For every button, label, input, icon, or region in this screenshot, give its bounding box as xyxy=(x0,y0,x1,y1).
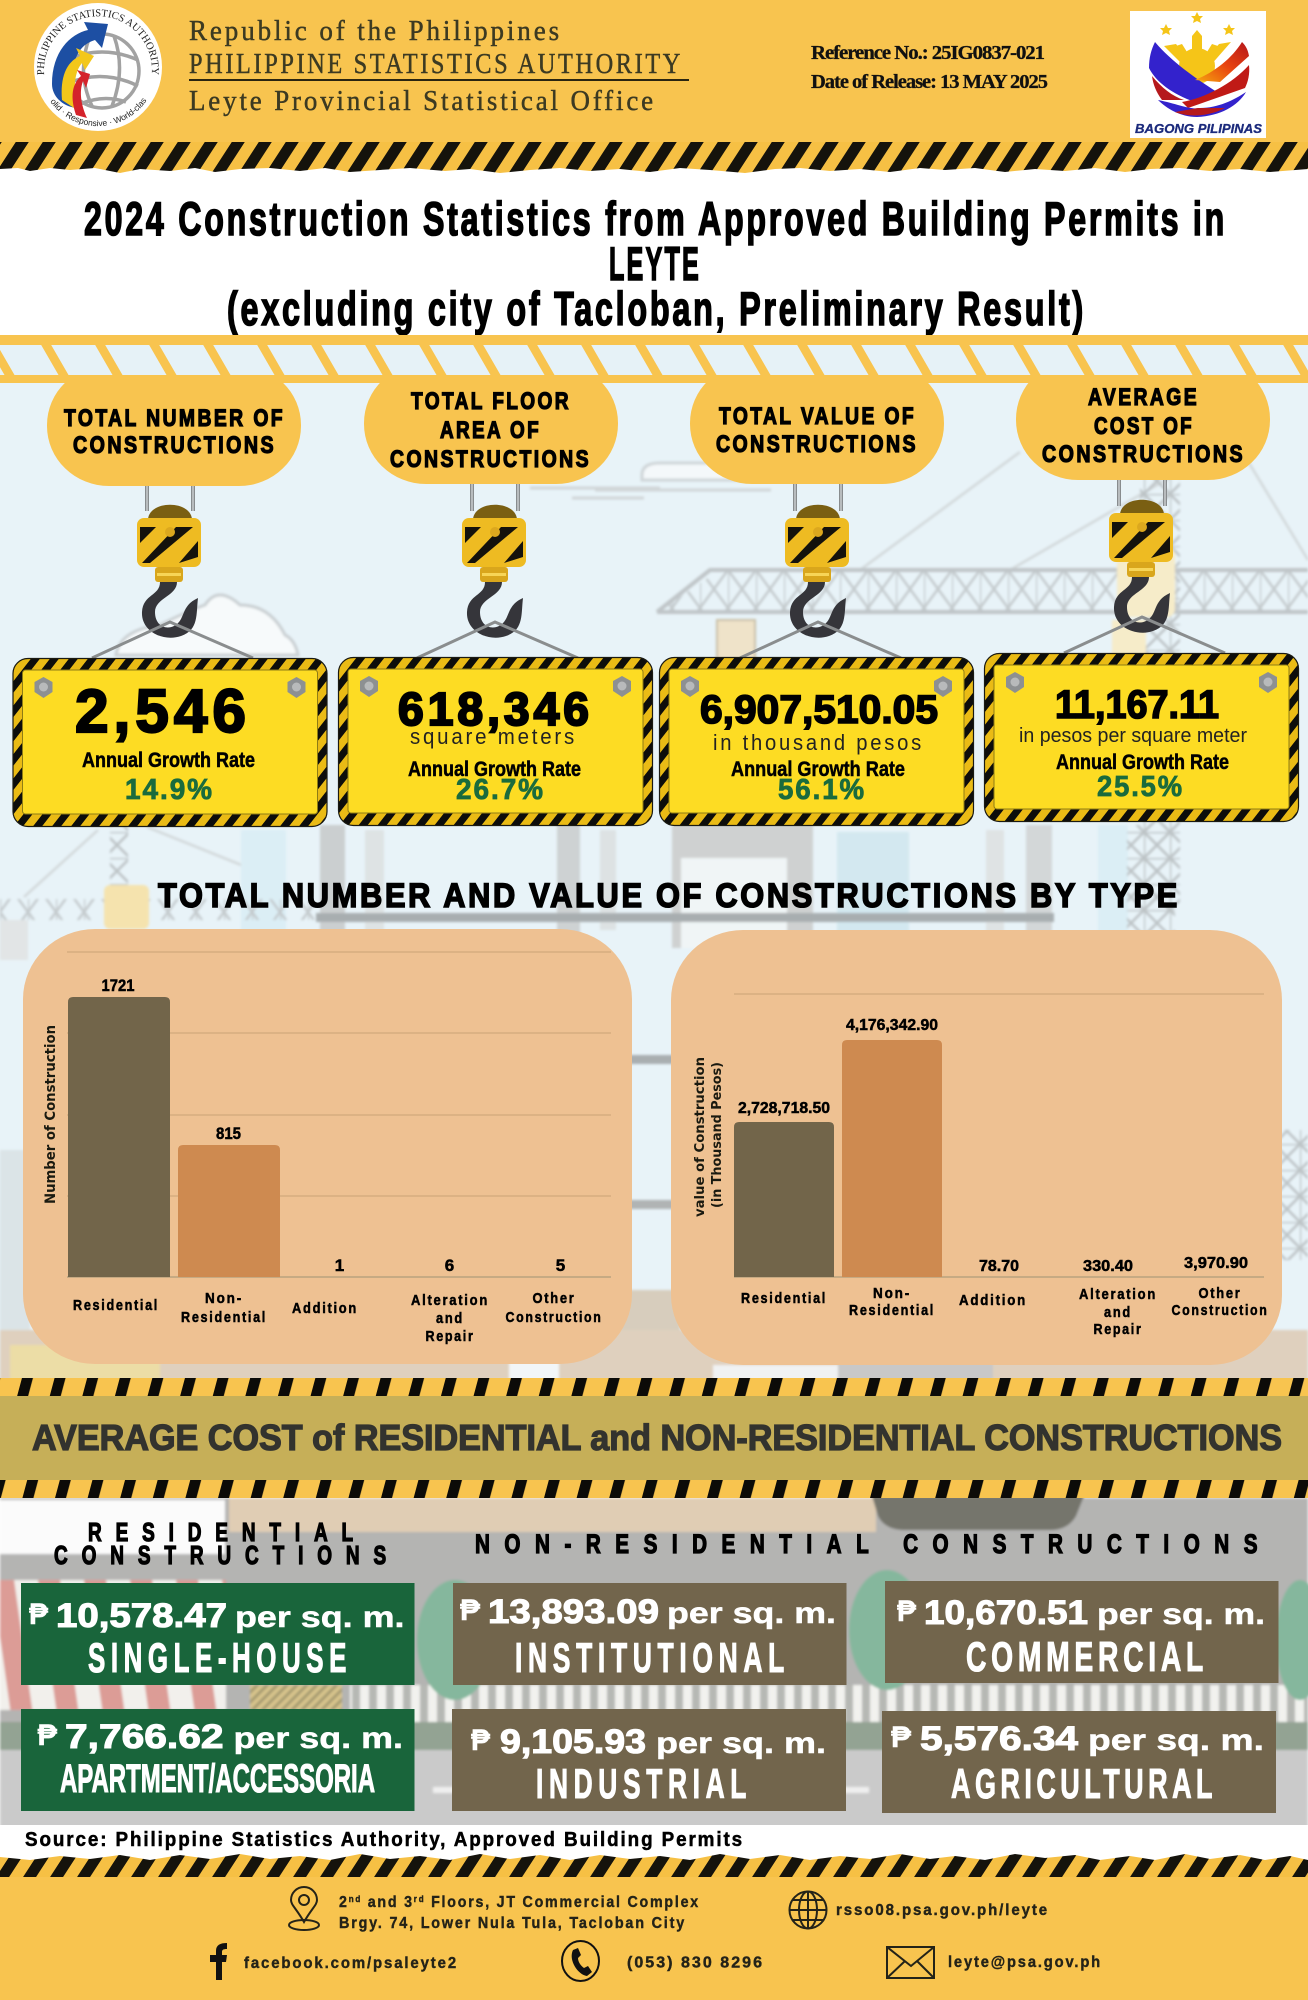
chart panel: value of constructions by type: 78.70 xyxy=(979,1258,1019,1275)
header band xyxy=(0,0,1308,145)
chart panel: number of constructions by type: Repair xyxy=(426,1328,474,1345)
hazard strip above footer xyxy=(0,1852,1308,1877)
title backdrop with torn paper edge xyxy=(0,168,1308,336)
chart panel: value of constructions by type: 4,176,342.90 xyxy=(846,1017,938,1034)
footer address: Brgy. 74, Lower Nula Tula, Tacloban City xyxy=(339,1915,686,1932)
bar: non-residential count xyxy=(178,1145,280,1277)
logo: Philippine Statistics Authority seal: PHILIPPINE STATISTICS AUTHORITY xyxy=(37,9,159,75)
footer facebook: facebook.com/psaleyte2 xyxy=(244,1955,458,1972)
chart panel: number of constructions by type: Other xyxy=(532,1290,576,1307)
logo: Bagong Pilipinas xyxy=(1130,11,1266,138)
footer email: leyte@psa.gov.ph xyxy=(948,1954,1102,1971)
cost card: institutional: 13,893.09 xyxy=(488,1593,659,1631)
label pill: floor area xyxy=(364,363,618,484)
chart panel: value of constructions by type: and xyxy=(1104,1304,1132,1321)
cost card: apartment/accessoria: APARTMENT/ACCESSORIA xyxy=(60,1757,375,1801)
footer address: 2 xyxy=(339,1894,350,1911)
label pill: total value: TOTAL VALUE OF xyxy=(719,403,916,430)
heading: residential constructions: RESIDENTIAL xyxy=(88,1517,367,1547)
sign: floor area: 618,346 xyxy=(398,683,593,735)
chart panel: number of constructions by type xyxy=(23,929,632,1364)
reference number and release date xyxy=(811,42,1048,93)
chart panel: value of constructions by type: (in Thousand Pesos) xyxy=(709,1062,725,1208)
label pill: total number: CONSTRUCTIONS xyxy=(73,432,276,459)
cost card: commercial: ₱ xyxy=(897,1595,917,1628)
sign: average cost xyxy=(984,654,1298,822)
sign: average cost: 11,167.11 xyxy=(1055,683,1219,727)
average cost band xyxy=(0,1396,1308,1480)
chart panel: value of constructions by type: Non- xyxy=(873,1285,911,1302)
chart panel: value of constructions by type: Residential xyxy=(741,1290,827,1307)
label pill: floor area: CONSTRUCTIONS xyxy=(390,446,591,473)
footer address: and 3 xyxy=(362,1894,414,1911)
logo: Bagong Pilipinas: BAGONG PILIPINAS xyxy=(1135,121,1262,136)
cost card: agricultural: ₱ xyxy=(891,1721,912,1754)
sign: total value: 56.1% xyxy=(778,774,866,806)
sign: average cost: 25.5% xyxy=(1097,771,1184,803)
cost card: apartment/accessoria: ₱ xyxy=(38,1719,58,1752)
icon: location pin xyxy=(289,1887,319,1930)
crane hook 1 xyxy=(92,470,253,658)
sign: total value: Annual Growth Rate xyxy=(731,758,905,781)
cost card: agricultural: per sq. m. xyxy=(1088,1724,1264,1757)
icon: phone xyxy=(562,1941,599,1981)
footer phone number: (053) 830 8296 xyxy=(627,1954,764,1972)
cost card: agricultural xyxy=(882,1711,1276,1813)
cost card: single-house: per sq. m. xyxy=(235,1601,404,1634)
label pill: total number: TOTAL NUMBER OF xyxy=(64,405,285,432)
chart panel: number of constructions by type: Number of Construction xyxy=(43,1025,59,1204)
cost card: institutional: ₱ xyxy=(460,1594,481,1627)
footer band xyxy=(0,1877,1308,2000)
reference number and release date: Date of Release: 13 MAY 2025 xyxy=(811,71,1048,93)
sign: total number: 14.9% xyxy=(125,774,214,806)
cost card: industrial: ₱ xyxy=(471,1724,491,1757)
crane hook 4 xyxy=(1064,465,1225,653)
cost card: industrial: per sq. m. xyxy=(656,1727,826,1760)
sign: total number xyxy=(13,658,327,826)
chart panel: number of constructions by type: 815 xyxy=(216,1124,241,1143)
title xyxy=(84,192,1227,335)
chart panel: value of constructions by type: Alteration xyxy=(1079,1286,1157,1303)
cost card: institutional: INSTITUTIONAL xyxy=(515,1634,790,1681)
chart panel: value of constructions by type: Residential xyxy=(849,1302,935,1319)
sign: total number: Annual Growth Rate xyxy=(82,749,255,772)
footer website: rsso08.psa.gov.ph/leyte xyxy=(836,1902,1049,1919)
cost card: apartment/accessoria: per sq. m. xyxy=(234,1722,403,1755)
chart panel: value of constructions by type: 2,728,718.50 xyxy=(738,1100,830,1117)
reference number and release date: Reference No.: 25IG0837-021 xyxy=(811,42,1044,64)
page background: construction site illustration xyxy=(0,345,1308,1828)
source band with torn edge xyxy=(0,1825,1308,1860)
heading: residential constructions: CONSTRUCTIONS xyxy=(54,1540,400,1570)
footer address: rd xyxy=(414,1894,425,1904)
hazard strip below average cost band xyxy=(0,1480,1308,1498)
sign: total value: in thousand pesos xyxy=(713,730,924,755)
cost card: institutional xyxy=(453,1583,846,1685)
chart panel: number of constructions by type: Construction xyxy=(506,1309,602,1326)
footer address: Floors, JT Commercial Complex xyxy=(425,1894,700,1911)
cost card: single-house xyxy=(21,1583,414,1685)
agency name block xyxy=(189,16,689,117)
chart panel: value of constructions by type xyxy=(671,930,1282,1365)
label pill: floor area: TOTAL FLOOR xyxy=(411,388,571,415)
chart panel: value of constructions by type: Other xyxy=(1198,1285,1242,1302)
cost card: single-house: 10,578.47 xyxy=(56,1597,227,1635)
label pill: floor area: AREA OF xyxy=(440,417,541,444)
label pill: total number xyxy=(47,365,301,486)
agency name block: Leyte Provincial Statistical Office xyxy=(189,86,656,117)
icon: envelope xyxy=(887,1947,934,1978)
footer address: nd xyxy=(349,1894,362,1904)
crane hook 3 xyxy=(740,470,901,658)
bar: non-residential value xyxy=(842,1040,942,1277)
cost card: commercial: 10,670.51 xyxy=(924,1594,1088,1632)
icon: facebook xyxy=(210,1943,227,1980)
chart panel: number of constructions by type: Addition xyxy=(292,1300,358,1317)
label pill: total value xyxy=(690,363,944,484)
chart panel: number of constructions by type: Residential xyxy=(73,1297,159,1314)
hazard strip above average cost band xyxy=(0,1378,1308,1396)
chart panel: value of constructions by type: value of Construction xyxy=(692,1057,708,1217)
sign: total number: 2,546 xyxy=(75,677,251,745)
sign: floor area xyxy=(338,658,652,826)
chart panel: number of constructions by type: 1 xyxy=(335,1256,344,1275)
agency name block: Republic of the Philippines xyxy=(189,16,562,47)
chart panel: number of constructions by type: 6 xyxy=(445,1256,454,1275)
agency name block: PHILIPPINE STATISTICS AUTHORITY xyxy=(189,49,683,80)
label pill: average cost: COST OF xyxy=(1094,413,1194,440)
sign: total value xyxy=(660,658,974,826)
sign: floor area: Annual Growth Rate xyxy=(408,758,581,781)
heading: residential constructions xyxy=(54,1517,400,1570)
chart panel: number of constructions by type: 5 xyxy=(556,1256,565,1275)
hazard strip under header xyxy=(0,142,1308,174)
label pill: average cost: AVERAGE xyxy=(1088,384,1199,411)
chart panel: number of constructions by type: and xyxy=(436,1310,464,1327)
chart panel: number of constructions by type: 1721 xyxy=(102,976,134,995)
chart panel: value of constructions by type: Repair xyxy=(1094,1321,1142,1338)
title: LEYTE xyxy=(609,237,701,290)
cost card: single-house: SINGLE-HOUSE xyxy=(88,1634,352,1681)
chart panel: number of constructions by type: Alteration xyxy=(411,1292,489,1309)
chart panel: value of constructions by type: 3,970.90 xyxy=(1184,1255,1248,1272)
cost card: institutional: per sq. m. xyxy=(667,1597,836,1630)
sign: floor area: square meters xyxy=(410,724,577,749)
label pill: total value: CONSTRUCTIONS xyxy=(716,431,918,458)
cost card: single-house: ₱ xyxy=(29,1598,49,1631)
cost card: apartment/accessoria: 7,766.62 xyxy=(65,1718,224,1756)
sign: floor area: 26.7% xyxy=(456,774,545,806)
chart panel: number of constructions by type: Residential xyxy=(181,1309,267,1326)
bar: residential count xyxy=(68,997,170,1277)
source note: Source: Philippine Statistics Authority, Approved Building Permits xyxy=(25,1829,744,1851)
crane hook 2 xyxy=(417,470,578,658)
logo: Philippine Statistics Authority seal xyxy=(34,3,162,131)
cost card: commercial: per sq. m. xyxy=(1097,1598,1265,1631)
sign: average cost: in pesos per square meter xyxy=(1019,725,1247,747)
scaffold bar at top of infographic xyxy=(0,335,1308,383)
icon: globe xyxy=(790,1891,827,1929)
cost card: industrial: INDUSTRIAL xyxy=(536,1760,752,1807)
label pill: average cost: CONSTRUCTIONS xyxy=(1042,441,1245,468)
bar: residential value xyxy=(734,1122,834,1277)
chart panel: number of constructions by type: Non- xyxy=(205,1290,243,1307)
cost card: industrial: 9,105.93 xyxy=(500,1723,646,1761)
chart panel: value of constructions by type: Addition xyxy=(959,1292,1027,1309)
cost card: agricultural: 5,576.34 xyxy=(920,1720,1078,1758)
cost card: apartment/accessoria xyxy=(21,1709,414,1811)
label pill: average cost xyxy=(1016,359,1270,480)
sign: average cost: Annual Growth Rate xyxy=(1056,751,1229,774)
chart panel: value of constructions by type: 330.40 xyxy=(1083,1258,1133,1275)
heading: charts: TOTAL NUMBER AND VALUE OF CONSTRUCTIONS BY TYPE xyxy=(158,877,1180,915)
footer address xyxy=(339,1894,700,1932)
cost card: commercial xyxy=(885,1581,1278,1683)
chart panel: value of constructions by type: Construction xyxy=(1172,1302,1268,1319)
sign: total value: 6,907,510.05 xyxy=(700,688,938,732)
cost card: industrial xyxy=(452,1709,846,1811)
